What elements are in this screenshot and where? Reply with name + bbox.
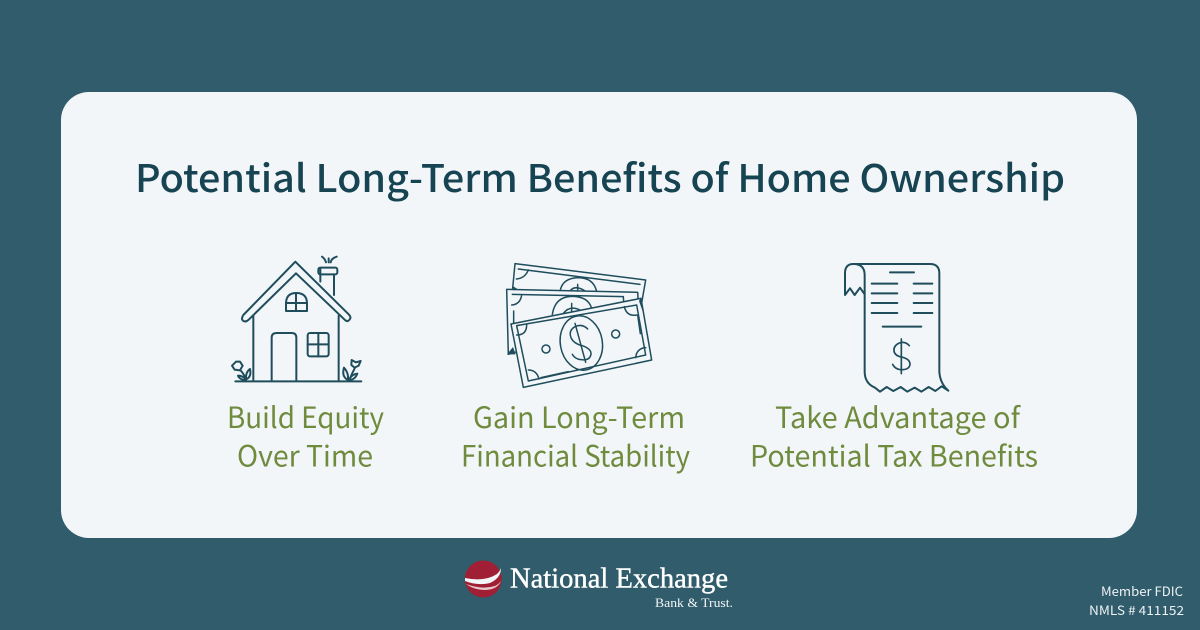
icon: receipt [845,264,948,392]
label: build equity: Over Time [237,434,373,476]
label: build equity: Build Equity [227,395,384,437]
label: tax benefits [750,395,1038,476]
title: Potential Long-Term Benefits of Home Ownership [135,148,1065,203]
logo wordmark: National Exchange [510,562,728,594]
label: financial stability [461,395,690,476]
icon: dollar bills [507,264,652,387]
logo tagline: Bank & Trust. [655,596,733,610]
logo globe [465,560,502,598]
member fdic note [1089,581,1184,619]
label: tax benefits: Take Advantage of [775,395,1022,437]
panel: benefits card [61,92,1137,538]
label: financial stability: Financial Stability [461,434,690,476]
member fdic note: NMLS # 411152 [1089,600,1184,619]
logo: National Exchange Bank & Trust [465,560,733,610]
label: tax benefits: Potential Tax Benefits [750,434,1038,476]
label: financial stability: Gain Long-Term [473,395,685,437]
member fdic note: Member FDIC [1101,581,1183,600]
label: build equity [227,395,384,476]
icon: house [232,257,361,381]
